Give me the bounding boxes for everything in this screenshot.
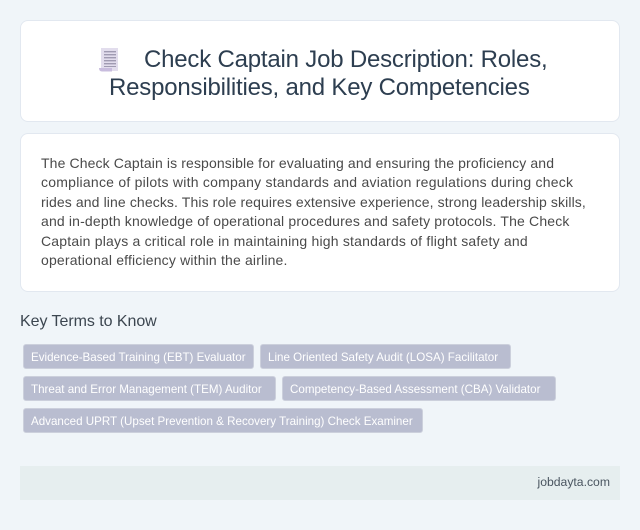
- panel: title card: [20, 20, 620, 122]
- tag: LOSA: [260, 344, 511, 369]
- description text: operational efficiency within the airline.: [41, 252, 288, 268]
- footer credit: jobdayta.com: [538, 475, 610, 489]
- description text: The Check Captain is responsible for evaluating and ensuring the proficiency and: [41, 155, 554, 171]
- title line 2: Responsibilities, and Key Competencies: [109, 74, 530, 101]
- tag: UPRT: Advanced UPRT (Upset Prevention & Recovery Training) Check Examiner: [31, 415, 413, 428]
- tag: CBA: [282, 376, 556, 401]
- tag: CBA: Competency-Based Assessment (CBA) Validator: [290, 383, 540, 396]
- heading: key terms: Key Terms to Know: [20, 313, 157, 330]
- icon: document scroll: [99, 48, 118, 72]
- description text: rides and line checks. This role requires extensive experience, strong leadership skills,: [41, 194, 586, 210]
- tag: TEM: Threat and Error Management (TEM) Auditor: [31, 383, 262, 396]
- tag: EBT: [23, 344, 254, 369]
- tag: EBT: Evidence-Based Training (EBT) Evaluator: [31, 351, 246, 364]
- tag list: [23, 344, 556, 433]
- description text: Captain plays a critical role in maintaining high standards of flight safety and: [41, 233, 528, 249]
- tag: TEM: [23, 376, 276, 401]
- description text: [41, 155, 586, 268]
- panel: description card: [20, 133, 620, 292]
- description text: compliance of pilots with company standards and aviation regulations during check: [41, 174, 573, 190]
- title line 1: Check Captain Job Description: Roles,: [144, 46, 547, 73]
- tag: UPRT: [23, 408, 423, 433]
- footer bar: [20, 466, 620, 500]
- tag: LOSA: Line Oriented Safety Audit (LOSA) Facilitator: [268, 351, 498, 364]
- description text: and in-depth knowledge of operational procedures and safety protocols. The Check: [41, 213, 570, 229]
